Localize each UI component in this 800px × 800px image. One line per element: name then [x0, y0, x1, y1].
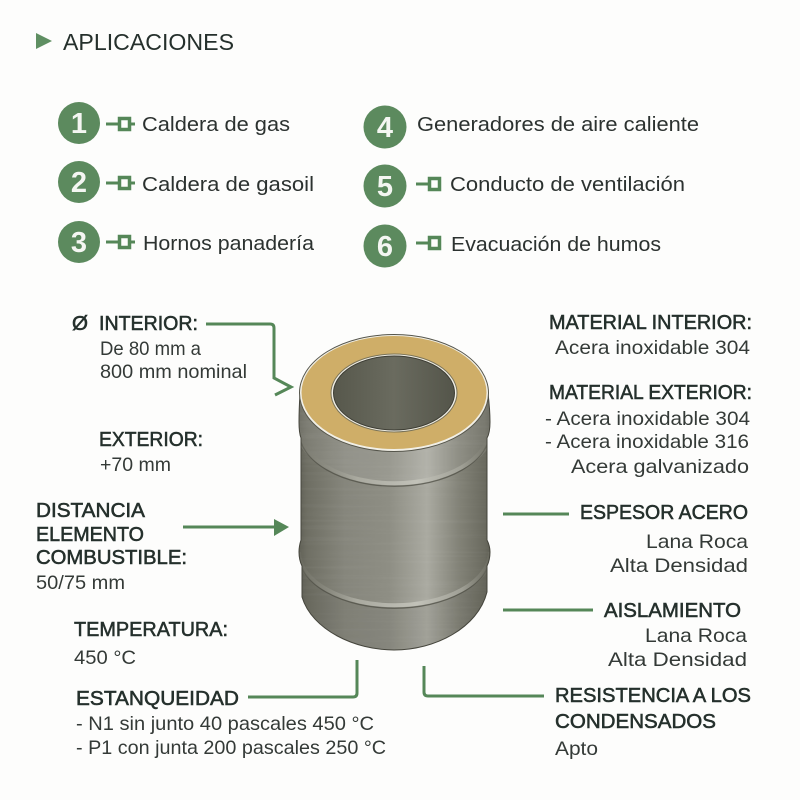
callout: distancia elemento combustible: ELEMENTO [36, 524, 144, 546]
item 5: 5 [377, 171, 393, 203]
callout: aislamiento [503, 600, 747, 671]
interior value: De 80 mm a [100, 338, 201, 360]
callout: material interior [549, 312, 752, 359]
panel: applications list [58, 102, 699, 268]
callout: distancia elemento combustible: COMBUSTIBLE: [36, 547, 187, 569]
callout: exterior: EXTERIOR: [99, 429, 203, 451]
callout: espesor acero: Alta Densidad [610, 555, 748, 577]
callout: distancia elemento combustible: DISTANCIA [36, 500, 146, 522]
item 6: Evacuación de humos [451, 233, 661, 256]
item 2 [58, 161, 314, 203]
illustration: insulated steel chimney pipe [295, 334, 495, 660]
callout: distancia elemento combustible: 50/75 mm [36, 572, 125, 594]
callout: material exterior: Acera galvanizado [571, 456, 749, 478]
callout: espesor acero: ESPESOR ACERO [580, 502, 748, 524]
callout: estanqueidad: - P1 con junta 200 pascales 250 °C [76, 737, 386, 759]
heading: aplicaciones [36, 29, 234, 55]
interior value [100, 338, 247, 383]
heading text: APLICACIONES [63, 29, 234, 55]
callout: aislamiento: Alta Densidad [608, 649, 747, 671]
item 4: 4 [377, 112, 393, 144]
pipe outline [299, 393, 490, 650]
callout: temperatura: 450 °C [74, 647, 136, 669]
item 5 [364, 164, 685, 208]
connector: estanqueidad [248, 660, 357, 697]
callout: espesor acero: Lana Roca [646, 531, 748, 553]
item 5: Conducto de ventilación [450, 173, 685, 196]
arrow: distance to pipe [183, 519, 289, 536]
callout: espesor acero [503, 502, 748, 577]
callout: temperatura [74, 619, 228, 669]
upper collar sheen [295, 400, 495, 484]
callout: temperatura: TEMPERATURA: [74, 619, 228, 641]
inner opening [331, 354, 457, 432]
callout: resistencia a los condensados: CONDENSADOS [555, 711, 716, 733]
item 6: 6 [377, 231, 393, 263]
callout: estanqueidad: - N1 sin junto 40 pascales 450 °C [76, 713, 374, 735]
item 4: Generadores de aire caliente [417, 113, 699, 136]
insulation top ring [300, 334, 488, 452]
callout: estanqueidad [76, 660, 386, 759]
item 3 [58, 221, 315, 263]
arrow: interior to opening [206, 324, 291, 395]
callout: material exterior: MATERIAL EXTERIOR: [549, 382, 752, 404]
callout: interior [72, 313, 291, 395]
item 1: 1 [71, 108, 87, 140]
upper groove [302, 442, 486, 487]
interior value: 800 mm nominal [100, 361, 247, 383]
item 1: Caldera de gas [142, 113, 290, 136]
callout: resistencia a los condensados [424, 666, 751, 760]
icon: heading triangle [36, 33, 52, 49]
callout: material interior: Acera inoxidable 304 [555, 337, 750, 359]
callout: estanqueidad: ESTANQUEIDAD [76, 688, 239, 710]
item 6 [364, 224, 661, 268]
item 2: 2 [71, 167, 87, 199]
diameter symbol: Ø [72, 313, 88, 335]
item 3: Hornos panadería [143, 232, 315, 255]
item 3: 3 [71, 227, 87, 259]
callout: resistencia a los condensados: Apto [555, 738, 598, 760]
callout: aislamiento: Lana Roca [645, 625, 747, 647]
item 1 [58, 102, 290, 144]
interior label: INTERIOR: [99, 313, 198, 335]
item 2: Caldera de gasoil [142, 173, 314, 196]
callout: aislamiento: AISLAMIENTO [604, 600, 741, 622]
callout: material exterior [545, 382, 752, 478]
lower groove [302, 562, 486, 609]
lower collar shade [406, 604, 439, 648]
callout: material exterior: - Acera inoxidable 316 [545, 431, 749, 453]
callout: material interior: MATERIAL INTERIOR: [549, 312, 752, 334]
callout: exterior [99, 429, 203, 476]
item 4 [364, 106, 699, 148]
pipe body [300, 399, 490, 650]
callout: material exterior: - Acera inoxidable 304 [545, 408, 750, 430]
callout: exterior: +70 mm [100, 454, 171, 476]
callout: resistencia a los condensados: RESISTENCIA A LOS [555, 685, 751, 707]
callout: distancia elemento combustible [36, 500, 289, 594]
